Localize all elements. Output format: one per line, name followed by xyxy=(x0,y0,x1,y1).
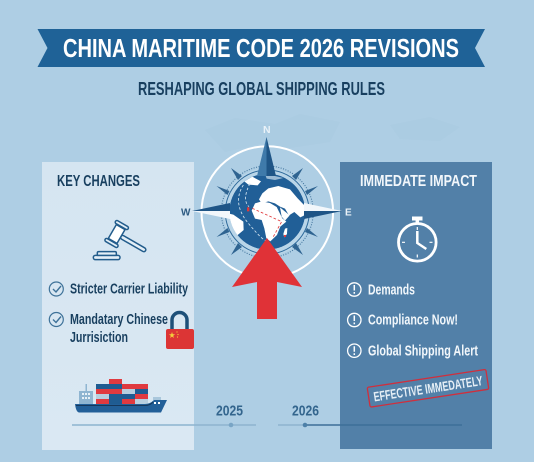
check item: carrier liability xyxy=(49,282,188,298)
icon: container ship xyxy=(75,379,167,412)
alert item: demands xyxy=(348,282,415,298)
alert item: global shipping alert xyxy=(348,344,478,360)
timeline line 2026 xyxy=(278,402,462,427)
red arrow xyxy=(232,238,302,319)
key changes heading: KEY CHANGES xyxy=(57,173,140,190)
icon: stopwatch xyxy=(398,218,436,261)
compass labels: E xyxy=(345,208,352,218)
Europe and Asia xyxy=(259,186,305,217)
check item: mandatory jurisdiction xyxy=(49,312,168,346)
stamp: effective immediately xyxy=(367,369,489,407)
compass rings xyxy=(201,146,333,278)
immediate impact heading: IMMEDATE IMPACT xyxy=(360,173,477,190)
alert item: demands: Demands xyxy=(368,282,415,298)
compass and globe xyxy=(192,137,342,278)
timeline line 2025: 2025 xyxy=(216,402,243,420)
title banner xyxy=(38,29,485,67)
shipping routes xyxy=(239,183,282,240)
South America and lit edge xyxy=(230,214,244,236)
subtitle: RESHAPING GLOBAL SHIPPING RULES xyxy=(138,79,385,99)
stamp: effective immediately: EFFECTIVE IMMEDATELY xyxy=(373,373,484,404)
timeline line 2025 xyxy=(72,402,256,427)
compass labels: N xyxy=(263,124,271,136)
icon: padlock with Chinese flag xyxy=(166,312,194,349)
alert item: compliance now xyxy=(348,312,458,328)
check item: mandatory jurisdiction: Mandatary Chinese xyxy=(70,312,168,328)
Madagascar xyxy=(283,228,287,237)
alert item: global shipping alert: Global Shipping Alert xyxy=(368,344,478,360)
alert item: compliance now: Compliance Now! xyxy=(368,312,458,328)
check item: carrier liability: Stricter Carrier Liability xyxy=(70,282,188,298)
red markers xyxy=(247,207,249,211)
compass minor points xyxy=(216,168,318,255)
check item: mandatory jurisdiction: Jurrisiction xyxy=(70,330,128,346)
North Atlantic land xyxy=(244,177,261,185)
panel: key changes xyxy=(42,162,194,450)
compass labels: W xyxy=(181,208,191,218)
Arabia xyxy=(280,207,290,221)
compass cardinal points xyxy=(192,137,342,219)
globe xyxy=(225,174,305,250)
timeline line 2026: 2026 xyxy=(292,402,319,420)
panel: immediate impact xyxy=(340,162,492,449)
timeline xyxy=(72,402,462,427)
icon: gavel xyxy=(93,220,152,261)
compass labels xyxy=(181,124,352,218)
Africa xyxy=(252,201,286,241)
